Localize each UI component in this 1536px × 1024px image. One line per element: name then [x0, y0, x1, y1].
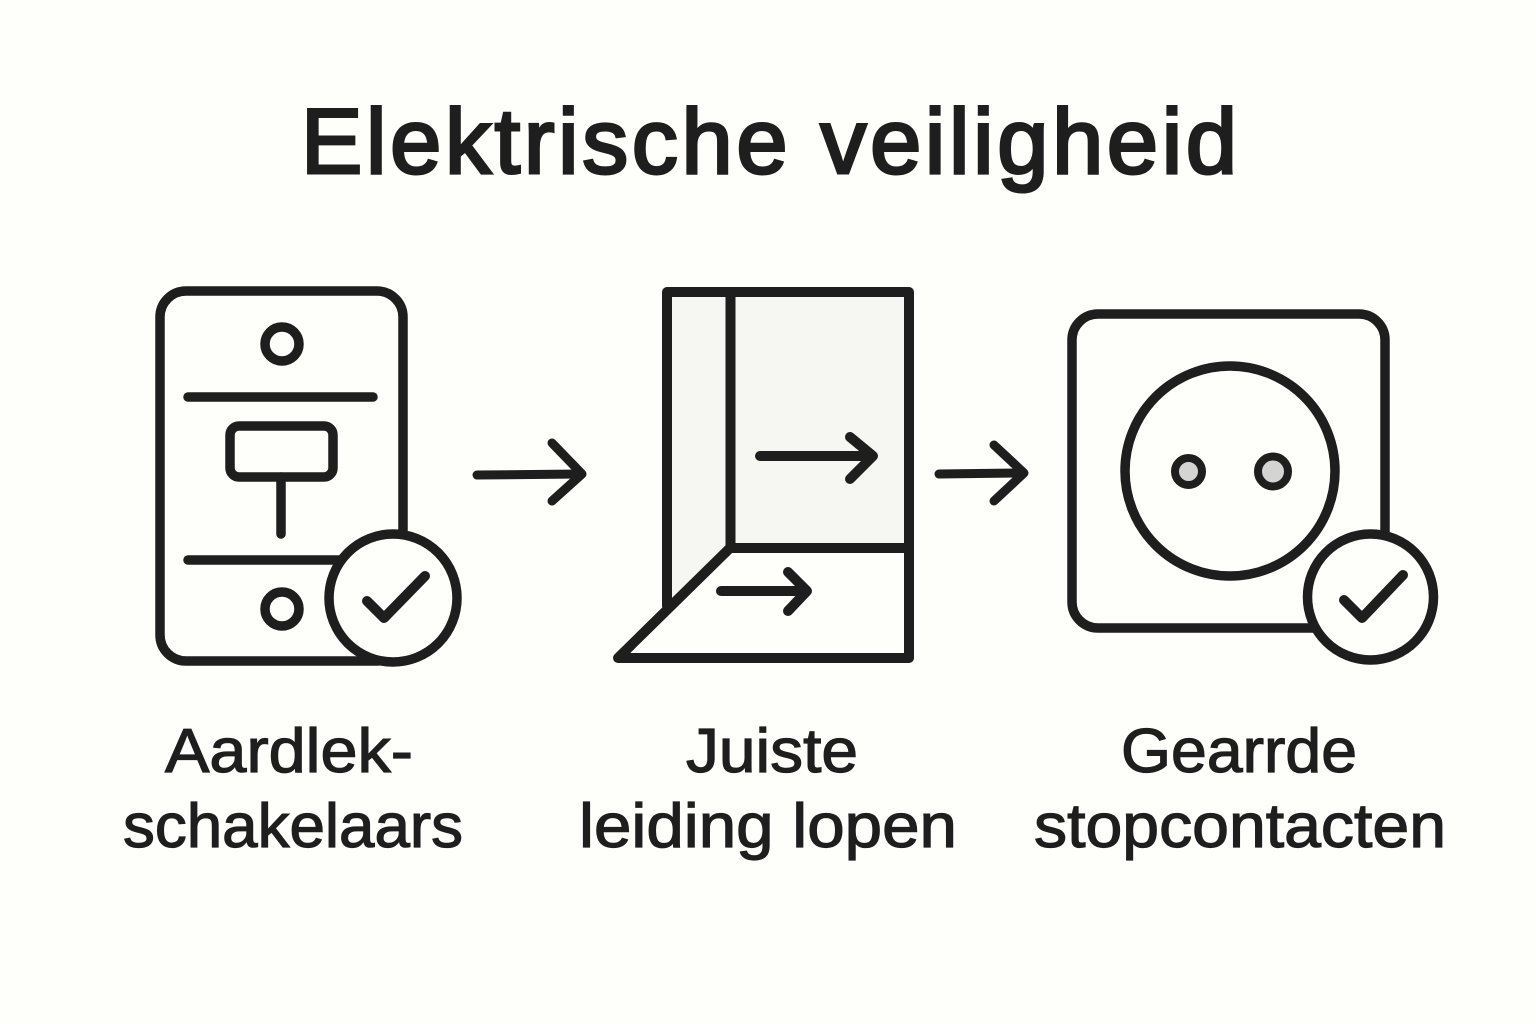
- label: juiste leiding lopen: [579, 717, 957, 861]
- arrow: step two to step three: [939, 445, 1024, 501]
- label: juiste leiding lopen: leiding lopen: [579, 792, 957, 861]
- label: gearrde stopcontacten: Gearrde: [1121, 717, 1357, 786]
- title: Elektrische veiligheid: [301, 91, 1237, 193]
- label: aardlekschakelaars: Aardlek-: [165, 717, 413, 786]
- label: aardlekschakelaars: [123, 717, 463, 861]
- icon: juiste leiding lopen: [618, 292, 909, 658]
- label: gearrde stopcontacten: stopcontacten: [1034, 792, 1446, 861]
- icon: aardlekschakelaar with check: [160, 291, 457, 662]
- label: gearrde stopcontacten: [1034, 717, 1446, 861]
- icon: geaard stopcontact with check: [1072, 314, 1434, 660]
- label: juiste leiding lopen: Juiste: [686, 717, 858, 786]
- arrow: step one to step two: [477, 443, 582, 501]
- label: aardlekschakelaars: schakelaars: [123, 792, 463, 861]
